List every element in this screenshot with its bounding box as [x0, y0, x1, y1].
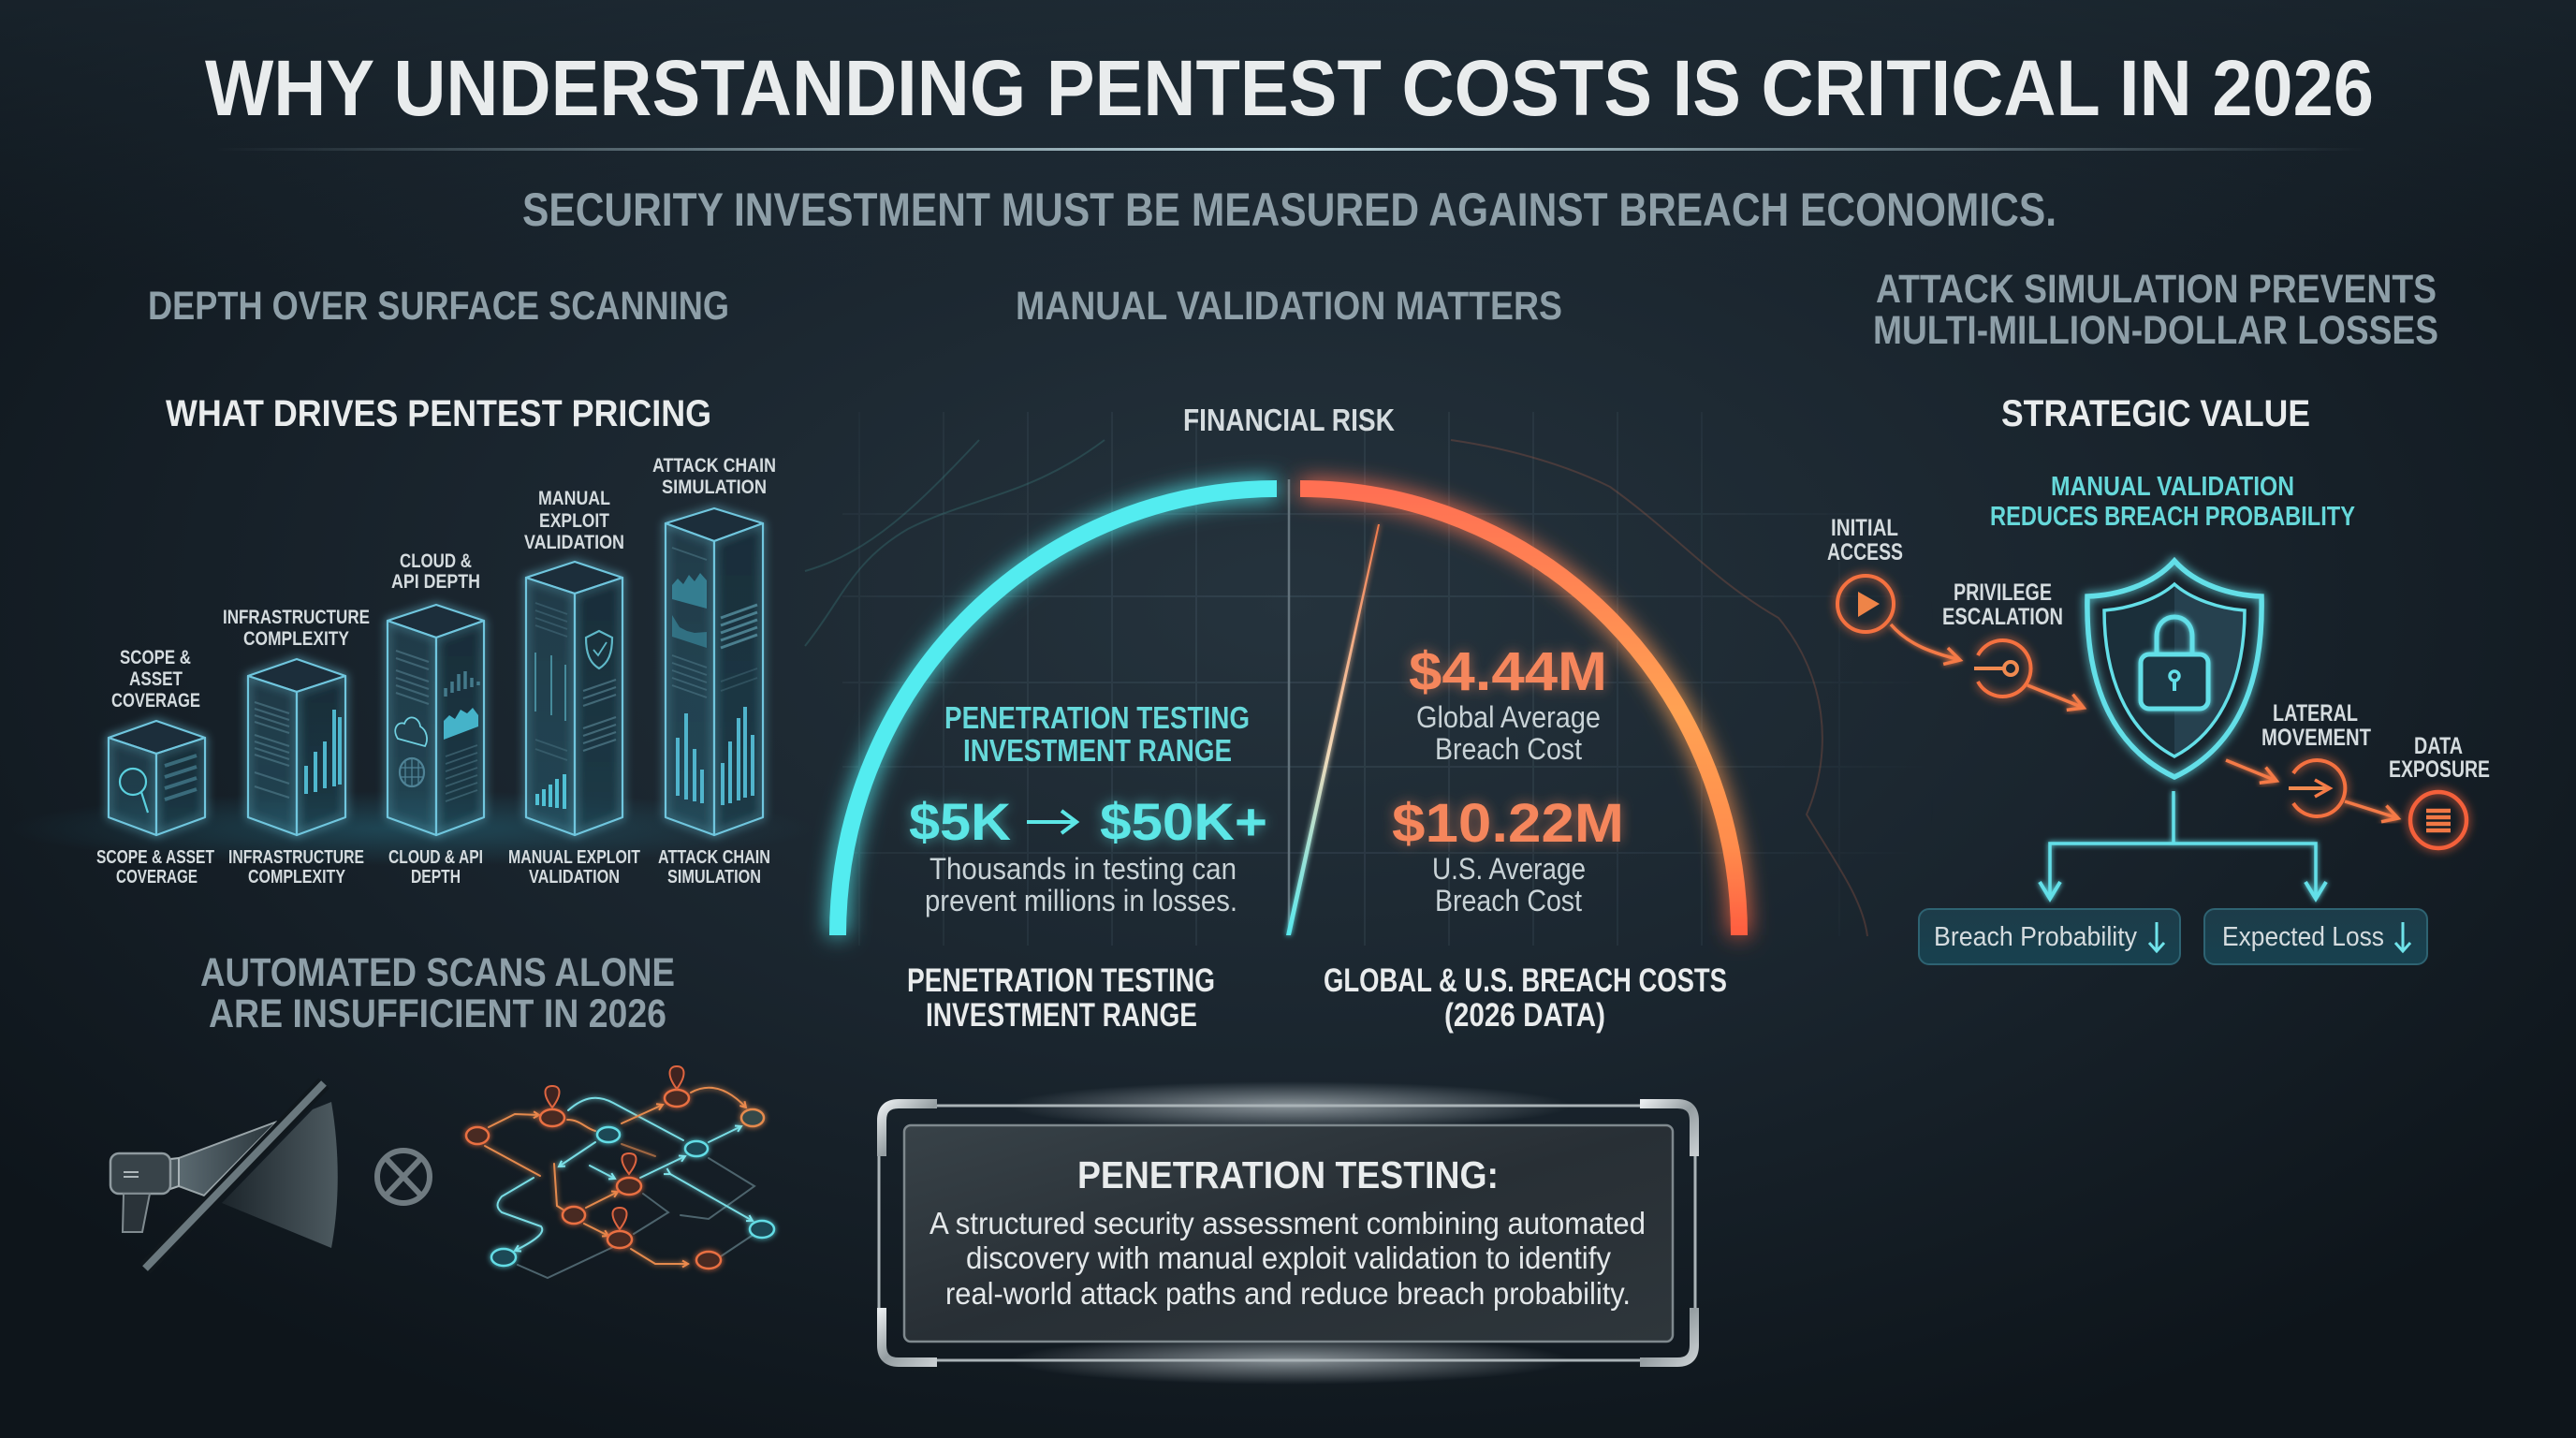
network nodes: orange: [466, 1090, 764, 1269]
gauge label: FINANCIAL RISK: [1183, 403, 1395, 437]
arrow: privilege to shield: [2027, 685, 2084, 708]
panel: pricing towers: [9, 455, 814, 888]
gauge baseline: [805, 934, 1778, 936]
breach cost readout: Breach Cost: [1435, 884, 1582, 917]
tower: cloud and api depth: CLOUD & API: [388, 847, 483, 868]
tower: manual exploit validation: VALIDATION: [529, 867, 620, 888]
breach cost readout: U.S. Average: [1432, 852, 1586, 886]
tower: attack chain simulation: ATTACK CHAIN: [658, 847, 770, 868]
title: WHY UNDERSTANDING PENTEST COSTS IS CRITICAL IN 2026: [205, 44, 2374, 132]
arrow: shield to lateral: [2226, 760, 2276, 781]
breach cost readout: Breach Cost: [1435, 732, 1582, 766]
attack step: data exposure: [2389, 733, 2490, 848]
investment range readout: INVESTMENT RANGE: [963, 733, 1232, 768]
tower: attack chain simulation: ATTACK CHAIN: [652, 455, 776, 477]
network edges: dim: [518, 1158, 754, 1278]
attack step: data exposure: EXPOSURE: [2389, 756, 2490, 783]
panel: definition callout: A structured security assessment combining automated: [929, 1206, 1646, 1240]
panel: definition callout: discovery with manual exploit validation to identify: [966, 1240, 1611, 1275]
breach cost readout: $10.22M: [1392, 793, 1624, 854]
gauge arc: investment: [838, 489, 1277, 935]
tower: attack chain simulation: SIMULATION: [662, 477, 767, 498]
gauge centre line: [1288, 479, 1290, 935]
tower: cloud and api depth: DEPTH: [411, 867, 461, 888]
tower: infrastructure complexity: COMPLEXITY: [248, 867, 346, 888]
network nodes: cyan: [491, 1127, 774, 1266]
chart: attack path network: [466, 1066, 774, 1278]
panel: financial risk gauge: [805, 403, 1778, 1034]
shield subtitle: MANUAL VALIDATION: [2051, 472, 2294, 502]
tower: manual exploit validation: EXPLOIT: [539, 510, 609, 532]
gauge caption: breach costs: [1324, 962, 1727, 1034]
network edges: cyan: [498, 1098, 753, 1251]
tower: infrastructure complexity: COMPLEXITY: [243, 628, 349, 650]
tower: cloud and api depth: [388, 550, 484, 888]
arrow: initial to privilege: [1891, 624, 1960, 660]
tower: attack chain simulation: [652, 455, 776, 888]
investment range readout: prevent millions in losses.: [925, 884, 1237, 917]
network pins: [545, 1066, 683, 1229]
tower: manual exploit validation: VALIDATION: [524, 532, 624, 553]
tower: infrastructure complexity: INFRASTRUCTURE: [228, 847, 364, 868]
investment range readout: PENETRATION TESTING: [944, 700, 1250, 735]
breach cost readout: $4.44M: [1409, 641, 1607, 702]
attack step: lateral movement: MOVEMENT: [2261, 725, 2371, 751]
tower: cloud and api depth: CLOUD &: [400, 550, 472, 572]
outcome: expected loss: [2204, 909, 2427, 964]
outcome: breach probability: [1919, 909, 2180, 964]
icon: not equal cross circle: [377, 1151, 430, 1203]
gauge caption: investment: PENETRATION TESTING: [907, 962, 1215, 999]
connector tree: [2040, 791, 2326, 899]
tower: scope and asset coverage: ASSET: [129, 668, 183, 690]
tower: scope and asset coverage: SCOPE & ASSET: [96, 847, 214, 868]
tower: infrastructure complexity: [223, 607, 370, 888]
heading: depth over surface scanning: DEPTH OVER SURFACE SCANNING: [148, 284, 729, 329]
heading: strategic value: STRATEGIC VALUE: [2001, 393, 2310, 434]
network edges: orange: [485, 1088, 746, 1264]
tower: scope and asset coverage: SCOPE &: [120, 647, 191, 668]
tower: scope and asset coverage: [96, 647, 214, 888]
tower: manual exploit validation: MANUAL EXPLOIT: [508, 847, 640, 868]
heading: attack simulation prevents losses: MULTI-MILLION-DOLLAR LOSSES: [1873, 308, 2438, 353]
tower: manual exploit validation: MANUAL: [538, 488, 610, 509]
tower: infrastructure complexity: INFRASTRUCTURE: [223, 607, 370, 628]
panel: definition callout: [879, 1081, 1695, 1385]
shield subtitle: [1990, 472, 2355, 532]
outcome: breach probability: Breach Probability: [1934, 922, 2137, 952]
gauge caption: investment: [907, 962, 1215, 1034]
attack step: initial access: ACCESS: [1827, 539, 1903, 565]
heading: automated scans insufficient: ARE INSUFFICIENT IN 2026: [209, 991, 666, 1036]
attack step: data exposure: DATA: [2414, 733, 2463, 759]
title divider: [215, 148, 2368, 151]
heading: what drives pentest pricing: WHAT DRIVES PENTEST PRICING: [166, 393, 711, 434]
gauge arc: breach cost: [1300, 489, 1739, 935]
subtitle: SECURITY INVESTMENT MUST BE MEASURED AGAINST BREACH ECONOMICS.: [522, 183, 2056, 236]
shield subtitle: REDUCES BREACH PROBABILITY: [1990, 502, 2355, 532]
heading: automated scans insufficient: AUTOMATED SCANS ALONE: [200, 950, 675, 995]
gauge caption: breach costs: GLOBAL & U.S. BREACH COSTS: [1324, 962, 1727, 999]
arrow: lateral to data: [2345, 801, 2398, 818]
investment range readout: Thousands in testing can: [929, 852, 1237, 886]
gauge needle: [1286, 524, 1380, 935]
heading: automated scans insufficient: [200, 950, 675, 1036]
attack step: initial access: [1827, 515, 1903, 632]
investment range readout: $5K: [909, 792, 1011, 851]
icon: shield with padlock: [2087, 561, 2261, 777]
attack step: privilege escalation: [1942, 580, 2063, 697]
outcome: expected loss: Expected Loss: [2222, 922, 2384, 952]
tower: manual exploit validation: [508, 488, 640, 888]
panel: strategic value diagram: [1827, 472, 2490, 964]
attack step: lateral movement: LATERAL: [2273, 700, 2358, 726]
investment range readout: [909, 700, 1267, 917]
heading: manual validation matters: MANUAL VALIDATION MATTERS: [1016, 284, 1562, 329]
panel: definition callout: real-world attack paths and reduce breach probability.: [945, 1276, 1631, 1311]
tower: scope and asset coverage: COVERAGE: [116, 867, 198, 888]
gauge caption: breach costs: (2026 DATA): [1444, 997, 1605, 1034]
gauge caption: investment: INVESTMENT RANGE: [926, 997, 1197, 1034]
attack step: privilege escalation: PRIVILEGE: [1954, 580, 2052, 606]
heading: attack simulation prevents losses: [1873, 267, 2438, 353]
breach cost readout: [1392, 641, 1624, 917]
heading: attack simulation prevents losses: ATTACK SIMULATION PREVENTS: [1876, 267, 2437, 312]
tower: attack chain simulation: SIMULATION: [667, 867, 761, 888]
attack step: privilege escalation: ESCALATION: [1942, 604, 2063, 630]
attack step: initial access: INITIAL: [1831, 515, 1898, 541]
attack step: lateral movement: [2261, 700, 2371, 816]
panel: definition callout: PENETRATION TESTING:: [1077, 1153, 1499, 1196]
breach cost readout: Global Average: [1416, 700, 1601, 734]
investment range readout: $50K+: [1100, 792, 1267, 851]
icon: muted megaphone: [110, 1083, 338, 1269]
tower: cloud and api depth: API DEPTH: [391, 571, 480, 593]
tower: scope and asset coverage: COVERAGE: [111, 690, 200, 712]
